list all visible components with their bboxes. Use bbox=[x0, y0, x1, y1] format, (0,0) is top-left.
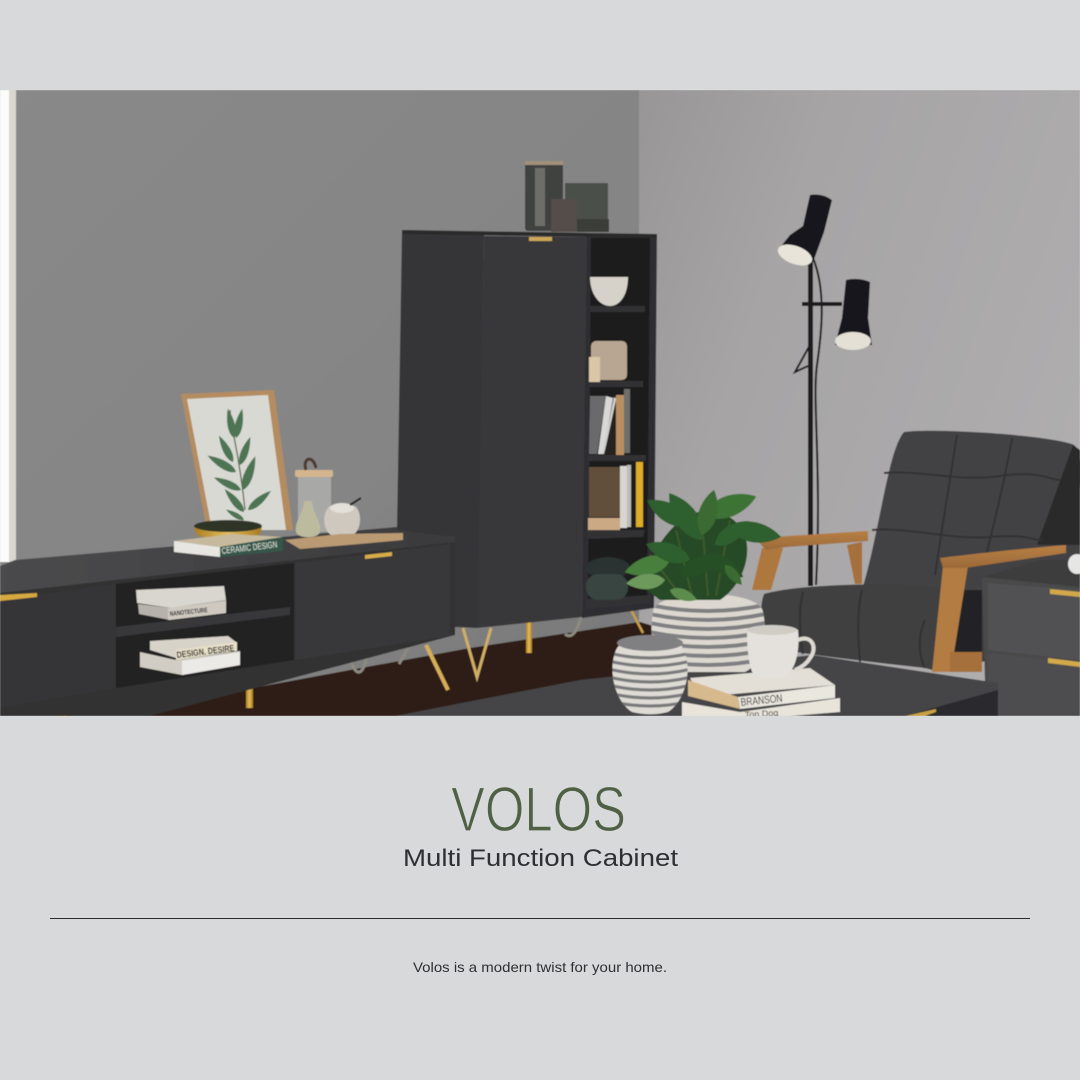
glass jar bbox=[295, 459, 333, 532]
cabinet door bbox=[477, 236, 587, 628]
large striped planter bbox=[645, 594, 770, 672]
books on shelf upper bbox=[136, 586, 226, 620]
wooden board bbox=[285, 533, 403, 549]
console body bbox=[0, 542, 455, 716]
title: VOLOS: VOLOS bbox=[451, 775, 626, 845]
cabinet legs bbox=[463, 604, 643, 677]
armchair bbox=[752, 431, 1080, 672]
floor bbox=[150, 622, 652, 716]
console legs bbox=[61, 645, 448, 717]
chair inner arm and wood frame back bbox=[847, 542, 862, 584]
lamp head lower bbox=[835, 279, 872, 350]
green book: CERAMIC DESIGN bbox=[221, 539, 278, 556]
right chair arm bbox=[932, 545, 1066, 672]
left wall bbox=[0, 90, 640, 716]
potted plant bbox=[622, 486, 783, 605]
console open compartment bbox=[116, 563, 294, 688]
shelf column bbox=[582, 234, 657, 618]
photo: living room scene bbox=[0, 90, 1080, 720]
stacked books: Top Dog bbox=[744, 708, 779, 720]
tall cabinet bbox=[397, 230, 657, 677]
drawer handles bbox=[1048, 589, 1080, 667]
sugar pot bbox=[324, 498, 361, 536]
cabinet side panel bbox=[397, 230, 484, 628]
books on shelf lower bbox=[140, 636, 240, 675]
gold tray bbox=[194, 520, 262, 540]
chair seat bbox=[761, 584, 990, 672]
floor lamp bbox=[775, 195, 872, 586]
top vessels bbox=[525, 161, 609, 232]
description text: Volos is a modern twist for your home. bbox=[413, 959, 667, 975]
stacked books bbox=[682, 668, 840, 720]
print leaves bbox=[205, 408, 273, 522]
subtitle: Multi Function Cabinet: Multi Function Cabinet bbox=[403, 845, 678, 872]
green book bbox=[174, 534, 283, 557]
right drawer unit bbox=[982, 554, 1080, 716]
TV console bbox=[0, 527, 455, 717]
books on shelf lower: DESIGN. DESIRE bbox=[176, 643, 235, 660]
right drawer bbox=[295, 544, 450, 660]
small striped planter bbox=[605, 635, 695, 714]
shelf books lower bbox=[588, 462, 643, 530]
chair back bbox=[862, 431, 1080, 600]
coffee cup bbox=[747, 625, 814, 678]
ceramic vase bbox=[296, 501, 320, 537]
door handle bbox=[529, 237, 552, 241]
framed botanical print bbox=[181, 390, 293, 530]
shelves bbox=[586, 306, 650, 609]
shelf canister bbox=[589, 341, 627, 382]
console handles bbox=[0, 552, 392, 601]
console top bbox=[0, 527, 455, 594]
books on shelf upper: NANOTECTURE bbox=[169, 607, 208, 618]
window edge bbox=[0, 90, 16, 562]
right wall bbox=[639, 90, 1080, 716]
shelf books upper bbox=[589, 389, 630, 455]
coffee table bbox=[395, 655, 998, 716]
rolled mats bbox=[586, 557, 630, 600]
left chair arm bbox=[752, 531, 868, 590]
lamp head upper bbox=[775, 195, 832, 270]
shelf bowl bbox=[590, 277, 628, 306]
stacked books: BRANSON bbox=[740, 693, 783, 709]
console shelf bbox=[116, 607, 290, 637]
left drawer bbox=[0, 584, 115, 708]
chair tufting bbox=[872, 435, 1060, 575]
